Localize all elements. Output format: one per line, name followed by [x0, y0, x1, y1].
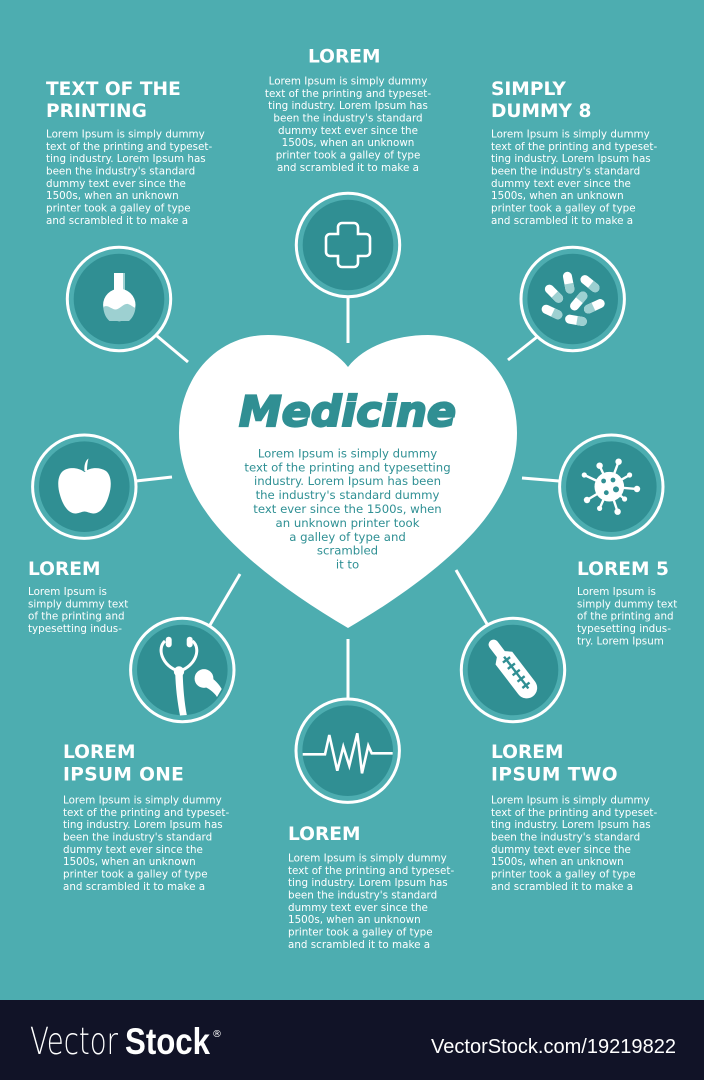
body text: lorem ipsum two: been the industry's standard	[491, 832, 640, 844]
body text: lorem ipsum one: been the industry's standard	[63, 832, 212, 844]
heading: lorem 5: LOREM 5	[577, 559, 669, 580]
body text: lorem ipsum two: Lorem Ipsum is simply dummy	[491, 794, 650, 806]
body text: text of the printing: been the industry's standard	[46, 166, 195, 178]
body text: lorem ipsum two: text of the printing and typeset-	[491, 807, 657, 819]
body text: top lorem: text of the printing and typeset-	[265, 88, 431, 100]
heading: lorem ipsum two: LOREM	[491, 742, 564, 763]
connector: flask to heart	[157, 336, 188, 362]
panel: top lorem	[265, 46, 431, 174]
icon: virus	[560, 435, 663, 538]
body text: text of the printing: dummy text ever since the	[46, 178, 186, 190]
body text: lorem 5: Lorem Ipsum is	[577, 586, 656, 598]
body text: top lorem: 1500s, when an unknown	[282, 137, 414, 149]
body text: top lorem: dummy text ever since the	[278, 125, 418, 137]
body text: bottom lorem: printer took a galley of type	[288, 926, 433, 938]
body text: lorem 5: of the printing and	[577, 611, 674, 623]
body text: lorem ipsum one: text of the printing and typeset-	[63, 807, 229, 819]
icon: apple	[33, 435, 136, 538]
body text: lorem ipsum two: and scrambled it to make a	[491, 881, 633, 893]
panel: lorem ipsum two	[491, 742, 657, 893]
heading: simply dummy 8: SIMPLY	[491, 79, 566, 100]
heart body text: it to	[336, 558, 359, 572]
body text: bottom lorem: 1500s, when an unknown	[288, 914, 421, 926]
body text: lorem ipsum one: Lorem Ipsum is simply dummy	[63, 794, 222, 806]
footer bar	[0, 1000, 704, 1080]
body text: simply dummy 8: 1500s, when an unknown	[491, 190, 624, 202]
body text: top lorem: ting industry. Lorem Ipsum has	[268, 100, 428, 112]
body text: left lorem: typesetting indus-	[28, 623, 122, 635]
connector: virus to heart	[522, 478, 559, 481]
body text: text of the printing: text of the printing and typeset-	[46, 141, 212, 153]
heart body text: an unknown printer took	[276, 516, 420, 530]
icon: flask	[67, 247, 171, 351]
body text: lorem 5: typesetting indus-	[577, 623, 671, 635]
heart body text: text of the printing and typesetting	[244, 460, 451, 474]
icon: thermometer	[461, 618, 565, 722]
icon: stethoscope	[131, 618, 234, 722]
body text: simply dummy 8: dummy text ever since the	[491, 178, 631, 190]
body text: simply dummy 8: printer took a galley of type	[491, 202, 636, 214]
body text: lorem ipsum one: printer took a galley of type	[63, 868, 208, 880]
body text: text of the printing: ting industry. Lorem Ipsum has	[46, 153, 206, 165]
heading: Medicine: Medicine	[239, 387, 456, 436]
connector: thermometer to heart	[456, 570, 487, 624]
heading: simply dummy 8: DUMMY 8	[491, 101, 591, 122]
body text: top lorem: printer took a galley of type	[276, 150, 420, 162]
heading: lorem ipsum one: LOREM	[63, 742, 136, 763]
heading: left lorem: LOREM	[28, 559, 101, 580]
body text: lorem 5: simply dummy text	[577, 598, 677, 610]
heart body text: a galley of type and	[289, 530, 406, 544]
body text: top lorem: Lorem Ipsum is simply dummy	[269, 76, 427, 88]
heart body text: text ever since the 1500s, when	[253, 502, 442, 516]
body text: bottom lorem: and scrambled it to make a	[288, 939, 430, 951]
body text: lorem ipsum one: 1500s, when an unknown	[63, 856, 196, 868]
connector: cross to heart	[346, 297, 350, 343]
heart body text: Lorem Ipsum is simply dummy	[258, 446, 437, 460]
heading: bottom lorem: LOREM	[288, 824, 361, 845]
icon: medical cross	[296, 193, 400, 297]
footer logo: Vector	[30, 1020, 119, 1063]
body text: left lorem: of the printing and	[28, 611, 125, 623]
body text: lorem 5: try. Lorem Ipsum	[577, 635, 664, 647]
body text: left lorem: simply dummy text	[28, 598, 128, 610]
body text: text of the printing: and scrambled it to make a	[46, 215, 188, 227]
heading: lorem ipsum two: IPSUM TWO	[491, 764, 618, 786]
body text: top lorem: and scrambled it to make a	[277, 162, 419, 174]
panel: text of the printing	[46, 79, 212, 227]
body text: lorem ipsum two: ting industry. Lorem Ipsum has	[491, 819, 651, 831]
panel: lorem 5	[577, 559, 677, 647]
body text: lorem ipsum one: dummy text ever since the	[63, 844, 203, 856]
connector: heartbeat to heart	[346, 639, 350, 699]
footer logo	[30, 1020, 222, 1063]
heading: lorem ipsum one: IPSUM ONE	[63, 764, 184, 786]
panel: lorem ipsum one	[63, 742, 229, 893]
connector: apple to heart	[136, 477, 172, 481]
body text: bottom lorem: Lorem Ipsum is simply dummy	[288, 852, 447, 864]
body text: text of the printing: Lorem Ipsum is simply dummy	[46, 128, 205, 140]
heart panel	[179, 335, 517, 628]
body text: bottom lorem: text of the printing and typeset-	[288, 865, 454, 877]
connector: stethoscope to heart	[210, 574, 240, 625]
body text: bottom lorem: been the industry's standard	[288, 890, 437, 902]
body text: simply dummy 8: ting industry. Lorem Ipsum has	[491, 153, 651, 165]
heading: text of the printing: TEXT OF THE	[46, 79, 181, 100]
heart body text: industry. Lorem Ipsum has been	[254, 474, 441, 488]
body text: lorem ipsum one: and scrambled it to make a	[63, 881, 205, 893]
footer logo: ®	[212, 1029, 222, 1040]
body text: top lorem: been the industry's standard	[273, 112, 423, 124]
footer image id: VectorStock.com/19219822	[431, 1035, 676, 1058]
body text: lorem ipsum one: ting industry. Lorem Ipsum has	[63, 819, 223, 831]
body text: simply dummy 8: text of the printing and typeset-	[491, 141, 657, 153]
body text: lorem ipsum two: dummy text ever since the	[491, 844, 631, 856]
panel: left lorem	[28, 559, 128, 635]
body text: lorem ipsum two: 1500s, when an unknown	[491, 856, 624, 868]
footer logo: Stock	[125, 1021, 210, 1062]
heading: text of the printing: PRINTING	[46, 101, 147, 122]
heart body text: the industry's standard dummy	[256, 488, 440, 502]
body text: bottom lorem: dummy text ever since the	[288, 902, 428, 914]
body text: text of the printing: 1500s, when an unknown	[46, 190, 179, 202]
panel: simply dummy 8	[491, 79, 657, 227]
icon: heartbeat	[296, 699, 399, 802]
body text: left lorem: Lorem Ipsum is	[28, 586, 107, 598]
heading: top lorem: LOREM	[308, 46, 381, 68]
body text: text of the printing: printer took a galley of type	[46, 202, 191, 214]
body text: simply dummy 8: Lorem Ipsum is simply dummy	[491, 128, 650, 140]
body text: simply dummy 8: been the industry's standard	[491, 166, 640, 178]
body text: simply dummy 8: and scrambled it to make a	[491, 215, 633, 227]
body text: bottom lorem: ting industry. Lorem Ipsum has	[288, 877, 448, 889]
icon: pills	[521, 247, 624, 351]
connector: pills to heart	[508, 337, 537, 360]
panel: bottom lorem	[288, 824, 454, 951]
heart body text: scrambled	[317, 544, 378, 558]
body text: lorem ipsum two: printer took a galley of type	[491, 868, 636, 880]
